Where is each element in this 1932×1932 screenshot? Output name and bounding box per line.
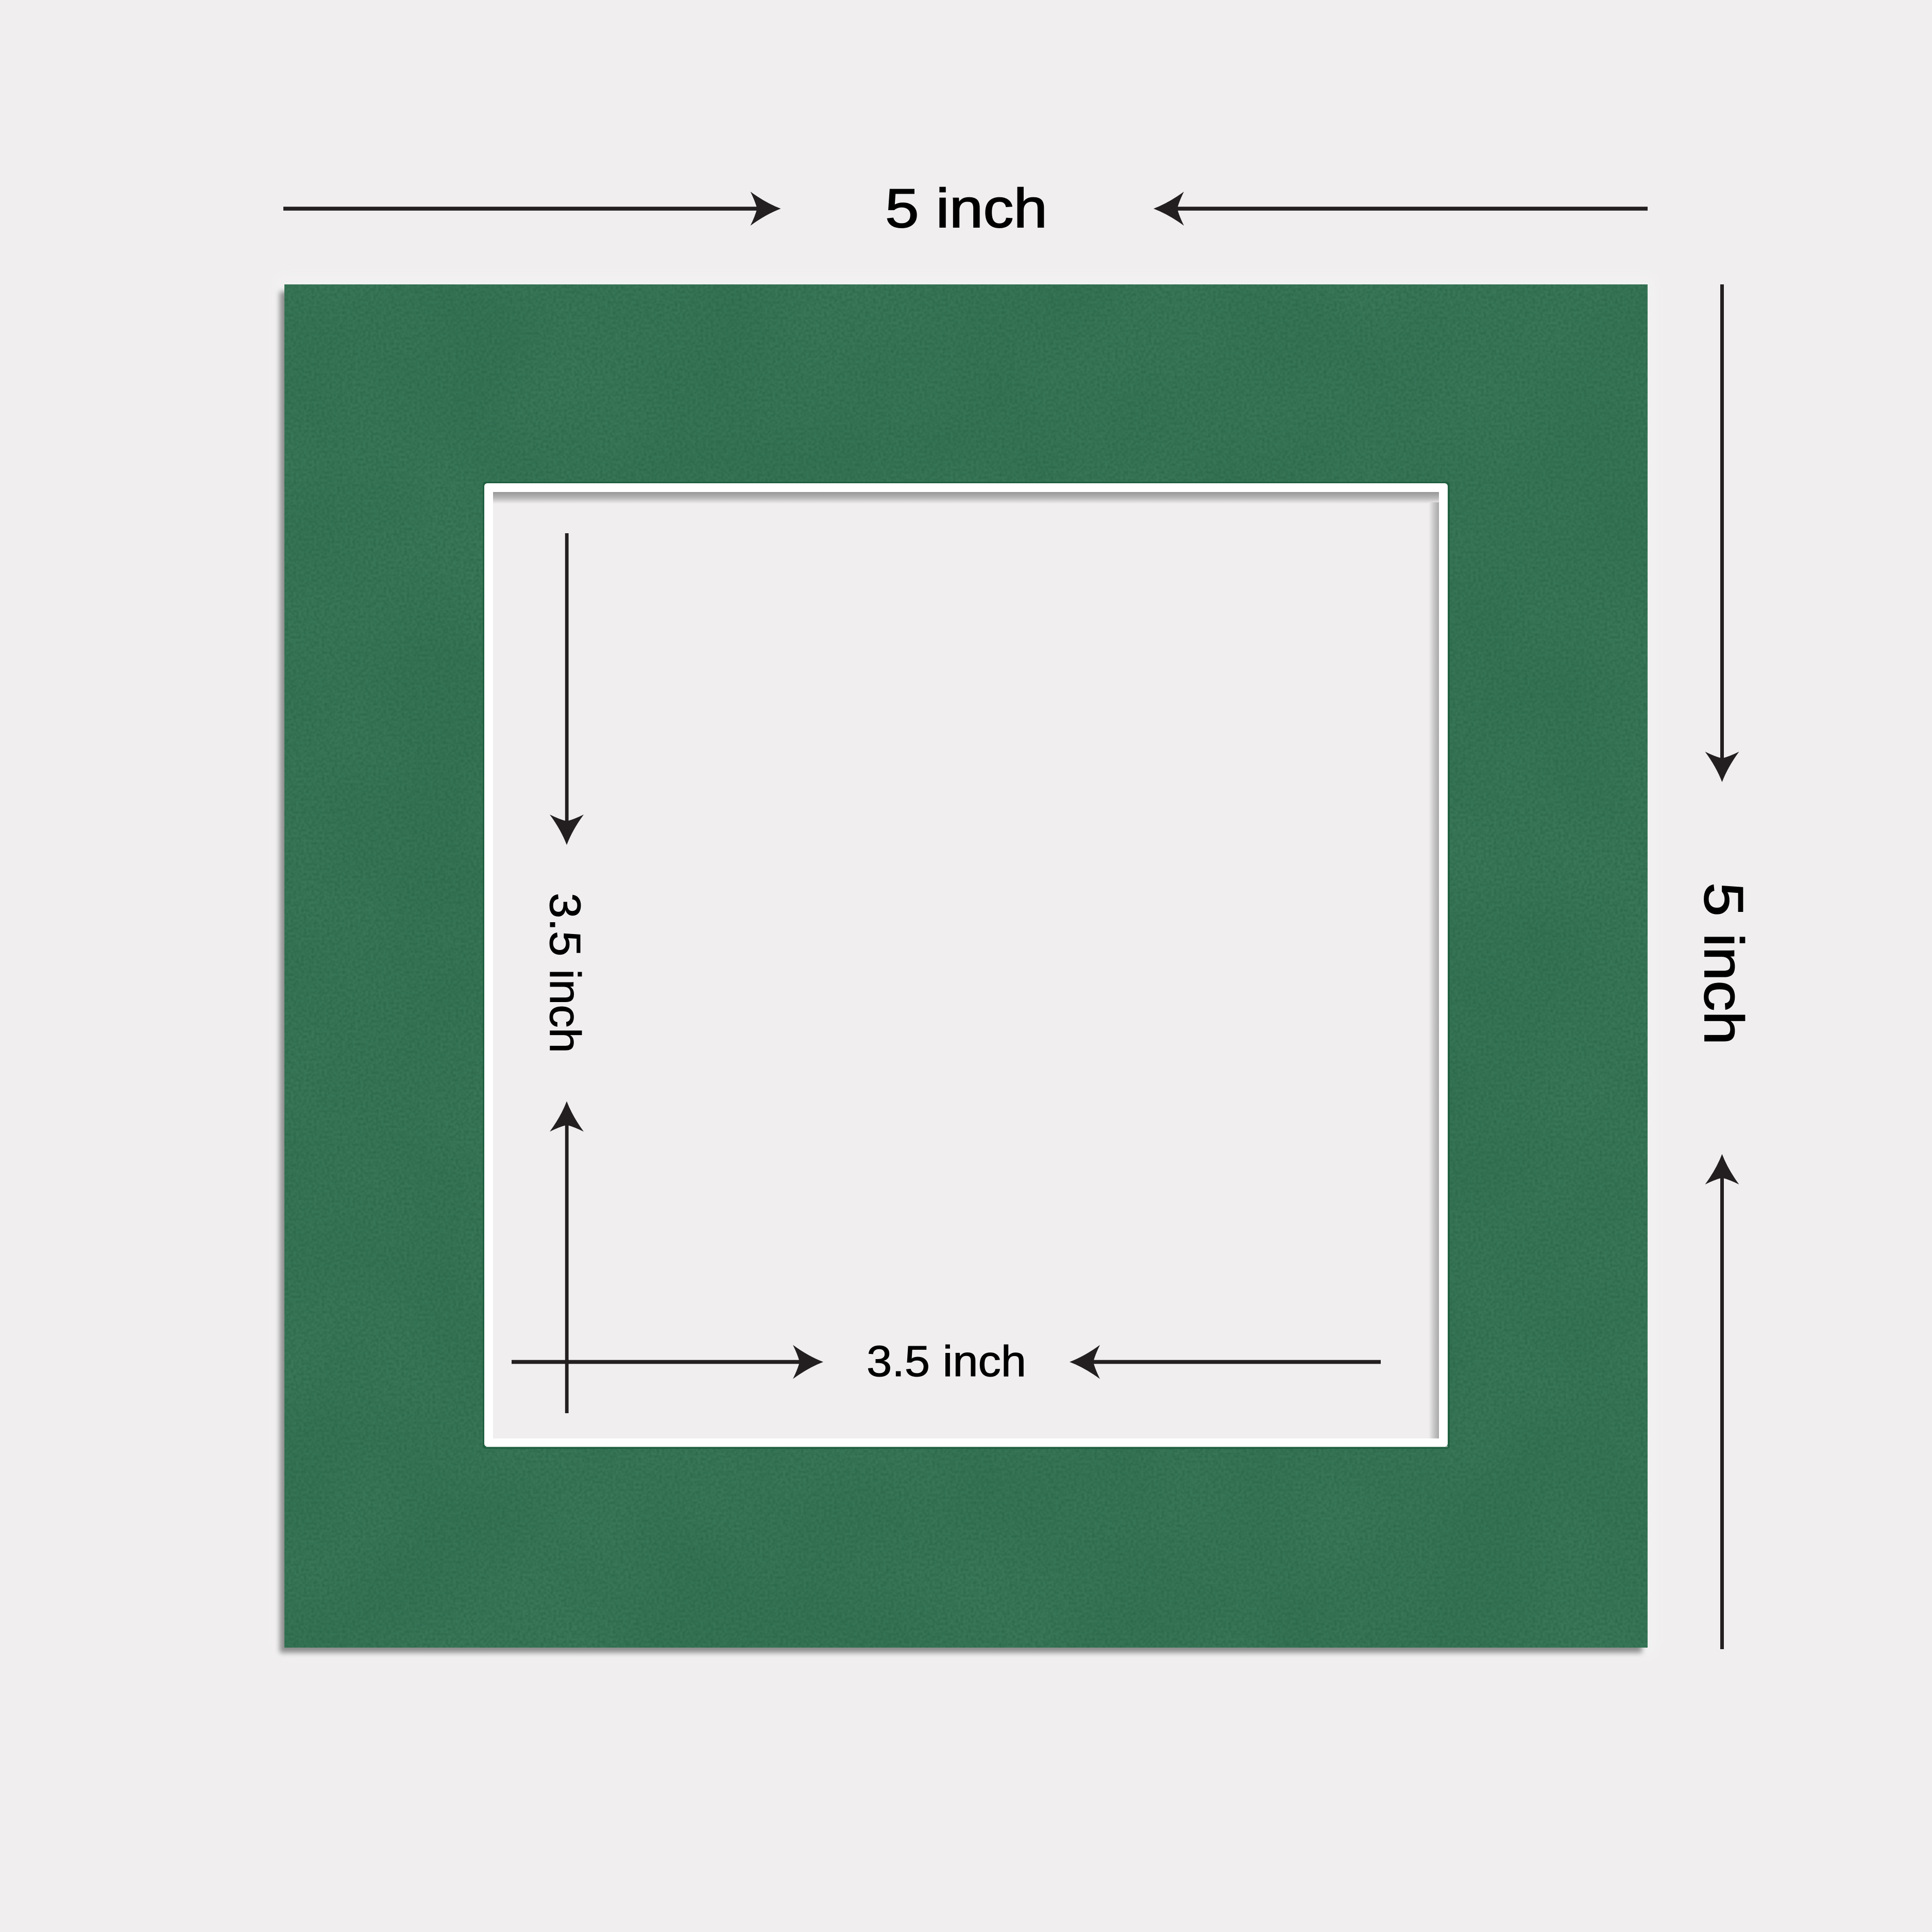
arrow: right lower pointing up <box>1705 1154 1739 1649</box>
white bevel <box>484 483 1448 1447</box>
arrow: inner right pointing left <box>1070 1345 1381 1379</box>
label: 3.5 inch vertical: 3.5 inch <box>541 893 589 1053</box>
dimension: right 5 inch <box>1693 284 1755 1649</box>
arrow: right upper pointing down <box>1705 284 1739 782</box>
arrow: inner left pointing right <box>512 1345 823 1379</box>
mat highlight halo <box>276 276 1656 1656</box>
dimension: top 5 inch <box>283 177 1648 239</box>
dimension: inner horizontal 3.5 inch <box>512 1337 1381 1385</box>
arrow: top right pointing left <box>1154 192 1648 226</box>
window lower highlight <box>486 1446 1448 1447</box>
label: 5 inch right: 5 inch <box>1693 883 1755 1045</box>
inner shadow: top <box>493 492 1439 504</box>
arrow: inner upper pointing down <box>550 533 584 845</box>
label: 5 inch top: 5 inch <box>885 177 1047 239</box>
mat green surface <box>284 284 1648 1648</box>
panel: green mat board with window <box>276 276 1656 1656</box>
window cut edge <box>483 482 1450 1449</box>
label: 3.5 inch horizontal: 3.5 inch <box>867 1337 1026 1385</box>
inner shadow: right <box>1429 502 1439 1438</box>
arrow: inner lower pointing up <box>550 1101 584 1413</box>
window opening <box>493 492 1439 1438</box>
dimension: inner vertical 3.5 inch <box>541 533 589 1413</box>
arrow: top left pointing right <box>283 192 781 226</box>
mat drop shadow <box>280 292 1642 1653</box>
